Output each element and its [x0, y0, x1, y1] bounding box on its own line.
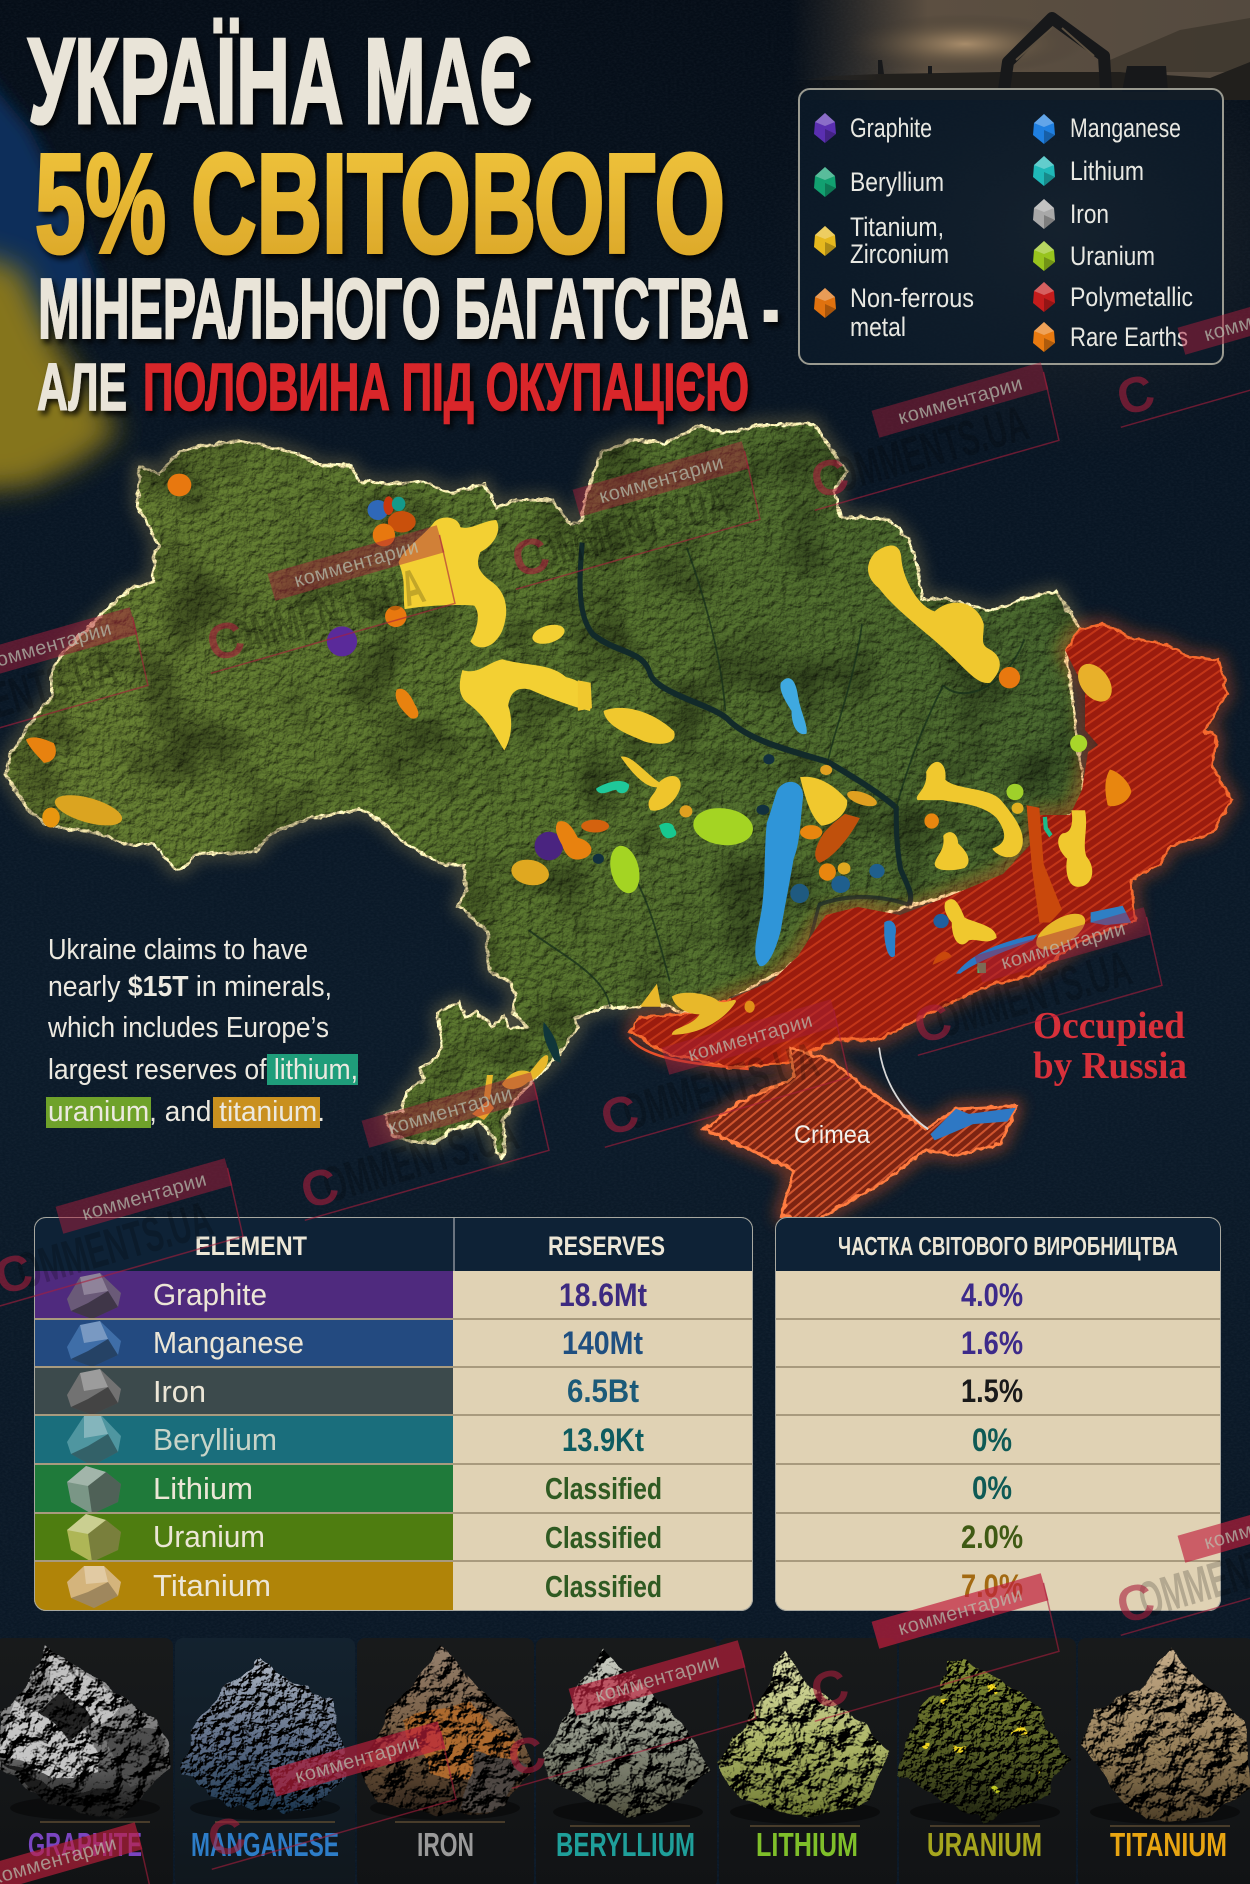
watermark: комментарии: [292, 536, 421, 592]
table header: [34, 1217, 753, 1271]
row: Manganese: 140Mt: [562, 1325, 643, 1361]
icon: beryllium stone: [67, 1414, 121, 1466]
watermark: комментарии: [686, 1010, 815, 1066]
sample card: Titanium: [1078, 1638, 1250, 1884]
watermark: [896, 907, 1166, 1056]
sample card: Manganese: MANGANESE: [191, 1826, 339, 1863]
text block: minerals claim: nearly $15T in minerals,: [48, 971, 332, 1003]
watermark: [490, 1640, 760, 1789]
icon: iron stone: [67, 1369, 121, 1415]
watermark: OMMENTS.UA: [317, 1105, 524, 1214]
watermark: [1099, 279, 1250, 428]
share values: 1.5%: [961, 1373, 1023, 1409]
legend item: Rare Earths: [1033, 322, 1188, 352]
row: Lithium: Lithium: [153, 1471, 253, 1506]
row: Lithium: Classified: [545, 1471, 662, 1506]
sample card: Lithium: [717, 1638, 897, 1884]
text block: minerals claim: Ukraine claims to have: [48, 934, 308, 966]
deposits: western half: [26, 474, 609, 889]
watermark: комментарии: [896, 1584, 1025, 1640]
icon: lithium stone: [67, 1466, 121, 1514]
title: УКРАЇНА МАЄ: [28, 13, 532, 149]
row: Iron: 6.5Bt: [567, 1373, 639, 1409]
icon: titanium stone: [67, 1566, 121, 1608]
map of Ukraine: [5, 423, 1232, 1220]
row: Iron: Iron: [153, 1374, 206, 1409]
legend item: Non-ferrous metal: [814, 283, 974, 342]
row: Beryllium: [34, 1414, 644, 1466]
legend item: Graphite: [814, 113, 932, 143]
Crimean bridge: [879, 1048, 928, 1129]
title: 5% СВІТОВОГО: [35, 124, 725, 282]
row: Uranium: Classified: [545, 1520, 662, 1555]
occupied territory glow: [631, 624, 1232, 1068]
legend item: Beryllium: [814, 167, 944, 197]
sample card: Iron: [357, 1638, 534, 1884]
legend item: Polymetallic: Polymetallic: [1070, 282, 1193, 312]
occupied territory: [631, 624, 1232, 1068]
watermark: C: [1110, 1571, 1161, 1635]
table header: RESERVES: [548, 1231, 665, 1261]
watermark: [793, 1573, 1063, 1722]
watermark: [190, 1721, 460, 1870]
watermark: комментарии: [593, 1651, 722, 1707]
free territory: [5, 423, 1085, 1158]
row: Manganese: Manganese: [153, 1325, 304, 1360]
watermark: [583, 999, 853, 1148]
watermark: C: [804, 446, 855, 510]
watermark: C: [505, 525, 556, 589]
watermark: [0, 1158, 247, 1307]
row: Uranium: Uranium: [153, 1519, 265, 1554]
table: element and reserves: [34, 1217, 753, 1611]
legend item: Titanium, Zirconium: Zirconium: [850, 239, 949, 269]
text block: minerals claim: which includes Europe’s: [47, 1012, 329, 1044]
legend item: Graphite: Graphite: [850, 113, 932, 143]
watermark: C: [804, 1657, 855, 1721]
sample card: Graphite: [0, 1638, 173, 1884]
row: Iron: [34, 1367, 639, 1415]
watermark: комментарии: [386, 1083, 515, 1139]
legend item: Manganese: [1033, 113, 1181, 144]
Crimea: [704, 1048, 1016, 1220]
table: share of world production: [775, 1217, 1221, 1611]
share values: 4.0%: [961, 1277, 1023, 1313]
table header: [775, 1217, 1221, 1271]
row: Manganese: [34, 1319, 643, 1367]
share values: 0%: [972, 1422, 1012, 1458]
row: Graphite: [34, 1271, 647, 1319]
sample card: Graphite: GRAPHITE: [28, 1826, 142, 1863]
row: Titanium: [34, 1561, 662, 1611]
row: Graphite: 18.6Mt: [559, 1277, 647, 1313]
icon: manganese stone: [67, 1321, 121, 1367]
watermark: [793, 362, 1063, 511]
watermark: [283, 1072, 553, 1221]
watermark: OMMENTS.UA: [223, 558, 430, 667]
Kinburn spit: [629, 1037, 749, 1069]
sample card: Uranium: URANIUM: [927, 1826, 1042, 1863]
watermark: C: [201, 1805, 252, 1869]
watermark: [189, 525, 459, 674]
Dnipro river and lakes: [529, 542, 1024, 1063]
share values: 7.0%: [961, 1568, 1023, 1604]
watermark: C: [907, 991, 958, 1055]
flag backdrop: blue and yellow: [0, 70, 120, 492]
title: ПОЛОВИНА ПІД ОКУПАЦІЄЮ: [143, 350, 749, 425]
watermark: комментарии: [999, 918, 1128, 974]
legend item: Polymetallic: [1033, 282, 1193, 312]
Crimea glow: [704, 1048, 1016, 1220]
watermark: C: [501, 1724, 552, 1788]
label: Occupied by Russia: by Russia: [1033, 1045, 1187, 1087]
sample card: Iron: IRON: [417, 1826, 474, 1863]
legend item: Non-ferrous metal: Non-ferrous: [850, 283, 974, 313]
sample card: Beryllium: [536, 1638, 717, 1884]
legend item: Titanium, Zirconium: [814, 212, 949, 269]
legend item: Lithium: [1033, 156, 1144, 186]
title: АЛЕ: [37, 350, 127, 425]
watermark: C: [1110, 363, 1161, 427]
label: Crimea: Crimea: [794, 1121, 870, 1149]
watermark: комментарии: [597, 452, 726, 508]
legend item: Iron: [1033, 199, 1109, 229]
text block: minerals claim: [46, 934, 358, 1128]
legend panel: [799, 89, 1223, 364]
legend item: Non-ferrous metal: metal: [850, 312, 906, 342]
legend item: Beryllium: Beryllium: [850, 167, 944, 197]
share values: 2.0%: [961, 1519, 1023, 1555]
watermark: C: [200, 609, 251, 673]
map glow: [5, 423, 1085, 1158]
label: Occupied by Russia: [1033, 1005, 1187, 1087]
share values: [961, 1277, 1023, 1604]
share values: 1.6%: [961, 1325, 1023, 1361]
legend item: Iron: Iron: [1070, 199, 1109, 229]
label: Occupied by Russia: Occupied: [1033, 1005, 1185, 1047]
deposits: eastern half: [578, 546, 1131, 1140]
text block: minerals claim: largest reserves of lithium,: [48, 1054, 358, 1086]
row: Uranium: [34, 1513, 662, 1562]
watermark: [0, 607, 152, 756]
icon: uranium stone: [67, 1514, 121, 1562]
watermark: [494, 441, 764, 590]
watermark: OMMENTS.UA: [11, 1191, 218, 1300]
watermark: комментарии: [293, 1732, 422, 1788]
row: Graphite: Graphite: [153, 1277, 267, 1312]
legend item: Uranium: [1033, 241, 1155, 271]
sample card: Uranium: [897, 1638, 1076, 1884]
sample card: Manganese: [175, 1638, 355, 1884]
mining scene with excavator: [770, 0, 1250, 460]
row: Lithium: [34, 1464, 662, 1514]
row: Titanium: Titanium: [153, 1568, 271, 1603]
watermark: C: [294, 1156, 345, 1220]
watermark: OMMENTS.UA: [617, 1032, 824, 1141]
title: [28, 13, 779, 425]
watermark: C: [594, 1083, 645, 1147]
legend item: Lithium: Lithium: [1070, 156, 1144, 186]
share values: 0%: [972, 1470, 1012, 1506]
icon: graphite stone: [67, 1273, 121, 1319]
row: Titanium: Classified: [545, 1569, 662, 1604]
table header: ELEMENT: [195, 1231, 307, 1261]
text block: minerals claim: uranium, and titanium.: [48, 1096, 325, 1128]
watermark: OMMENTS.UA: [528, 474, 735, 583]
row: Beryllium: 13.9Kt: [562, 1422, 644, 1458]
sample card: Lithium: LITHIUM: [756, 1826, 858, 1863]
mineral samples strip: [0, 1638, 1250, 1884]
legend item: Manganese: Manganese: [1070, 113, 1181, 143]
sample card: Beryllium: BERYLLIUM: [556, 1826, 695, 1863]
watermark: OMMENTS.UA: [827, 395, 1034, 504]
watermark: [0, 1822, 157, 1884]
legend item: Rare Earths: Rare Earths: [1070, 322, 1188, 352]
row: Beryllium: Beryllium: [153, 1422, 277, 1457]
watermark: комментарии: [896, 373, 1025, 429]
deposits: Odesa coast: [472, 1055, 548, 1120]
legend item: Titanium, Zirconium: Titanium,: [850, 212, 944, 242]
legend item: Uranium: Uranium: [1070, 241, 1155, 271]
watermark: комментарии: [80, 1169, 209, 1225]
